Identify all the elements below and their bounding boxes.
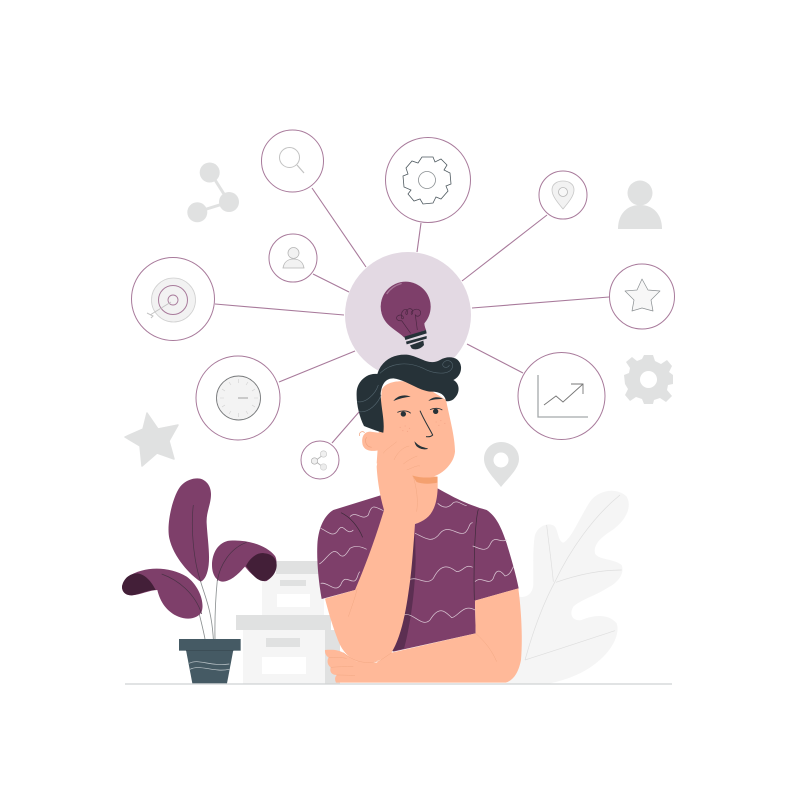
icon: grey share graph: [187, 162, 239, 222]
chin shadow: [412, 475, 437, 484]
node: gear: [386, 138, 470, 222]
freckles: [400, 421, 445, 431]
leaf: top: [169, 478, 211, 582]
ear: [362, 432, 383, 451]
node: share: [301, 441, 339, 479]
icon: grey star: [125, 413, 178, 466]
node: chart: [518, 352, 605, 440]
leaf: right: [212, 540, 277, 582]
leaf: left: [122, 569, 203, 619]
node: star: [610, 264, 674, 329]
connector lines: [215, 188, 609, 443]
icon: grey user: [618, 180, 662, 229]
icon: grey gear: [624, 355, 673, 404]
nose: [420, 411, 433, 437]
shirt: [317, 488, 519, 652]
ground line: [125, 683, 672, 685]
node: magnifier: [262, 130, 324, 192]
mouth: [415, 442, 428, 449]
hair: [357, 355, 461, 433]
background leaf: [507, 491, 629, 683]
plant: [122, 478, 277, 683]
head: [357, 355, 461, 484]
person: [317, 355, 522, 683]
node: user: [269, 234, 317, 282]
node: target: [132, 258, 214, 340]
icon: grey map pin: [484, 442, 519, 487]
boxes: [236, 561, 340, 684]
central circle: [345, 252, 471, 378]
node: clock: [196, 356, 280, 440]
arm and hand: [325, 440, 522, 683]
neck: [400, 473, 438, 524]
node: pin: [539, 171, 587, 219]
flower pot: [179, 639, 241, 683]
shirt wave pattern: [319, 502, 513, 622]
eyebrows and eyes: [393, 395, 443, 417]
icon: light bulb: [381, 282, 431, 349]
face: [377, 381, 455, 477]
